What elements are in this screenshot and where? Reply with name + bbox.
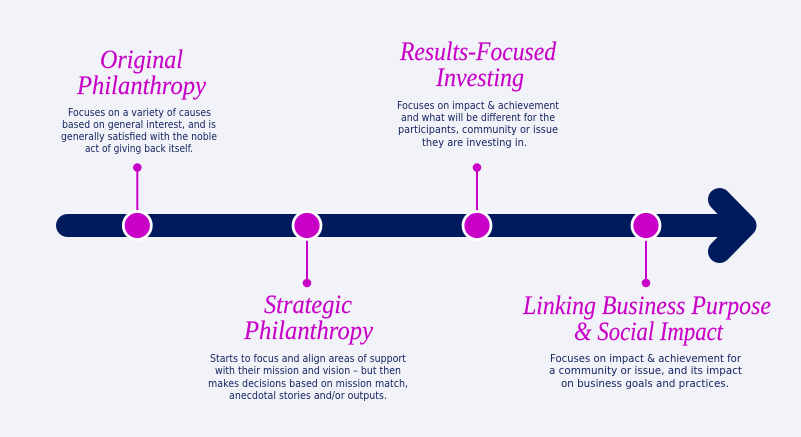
text block: strategic philanthropy bbox=[208, 353, 408, 402]
timeline arrow bbox=[68, 200, 745, 252]
text block: linking business purpose and social impact: a community or issue, and its impact bbox=[549, 365, 742, 377]
text block: results-focused investing: and what will be different for the bbox=[401, 112, 555, 124]
heading: results-focused investing bbox=[399, 37, 557, 92]
text block: results-focused investing: participants, community or issue bbox=[398, 124, 558, 136]
text block: strategic philanthropy: Starts to focus and align areas of support bbox=[210, 353, 406, 365]
text block: original philanthropy: Focuses on a variety of causes bbox=[68, 107, 211, 119]
milestone marker: results-focused investing bbox=[463, 163, 491, 240]
heading: linking business purpose and social impact bbox=[522, 291, 771, 346]
heading: linking business purpose and social impact: Linking Business Purpose bbox=[522, 291, 771, 320]
text block: results-focused investing: Focuses on impact & achievement bbox=[397, 100, 559, 112]
text block: linking business purpose and social impact bbox=[549, 353, 742, 390]
text block: strategic philanthropy: makes decisions based on mission match, bbox=[208, 378, 408, 390]
text block: original philanthropy bbox=[61, 107, 217, 155]
heading: original philanthropy: Philanthropy bbox=[76, 71, 206, 100]
text block: strategic philanthropy: with their mission and vision – but then bbox=[215, 365, 401, 377]
milestone marker: linking business purpose bbox=[632, 212, 660, 287]
text block: original philanthropy: based on general interest, and is bbox=[62, 119, 216, 131]
text block: original philanthropy: generally satisfied with the noble bbox=[61, 131, 217, 143]
text block: linking business purpose and social impact: Focuses on impact & achievement for bbox=[550, 353, 742, 365]
heading: linking business purpose and social impact: & Social Impact bbox=[574, 317, 724, 346]
text block: strategic philanthropy: anecdotal stories and/or outputs. bbox=[229, 390, 387, 402]
heading: results-focused investing: Results-Focused bbox=[399, 37, 557, 66]
heading: original philanthropy: Original bbox=[100, 45, 183, 74]
text block: original philanthropy: act of giving back itself. bbox=[85, 143, 193, 155]
heading: strategic philanthropy: Strategic bbox=[264, 290, 352, 319]
milestone marker: original philanthropy bbox=[123, 163, 151, 240]
text block: results-focused investing: they are investing in. bbox=[422, 137, 527, 149]
text block: results-focused investing bbox=[397, 100, 559, 149]
milestone marker: strategic philanthropy bbox=[293, 212, 321, 287]
text block: linking business purpose and social impact: on business goals and practices. bbox=[561, 378, 729, 390]
heading: original philanthropy bbox=[76, 45, 206, 100]
heading: strategic philanthropy bbox=[243, 290, 373, 345]
heading: strategic philanthropy: Philanthropy bbox=[243, 316, 373, 345]
heading: results-focused investing: Investing bbox=[435, 63, 524, 92]
